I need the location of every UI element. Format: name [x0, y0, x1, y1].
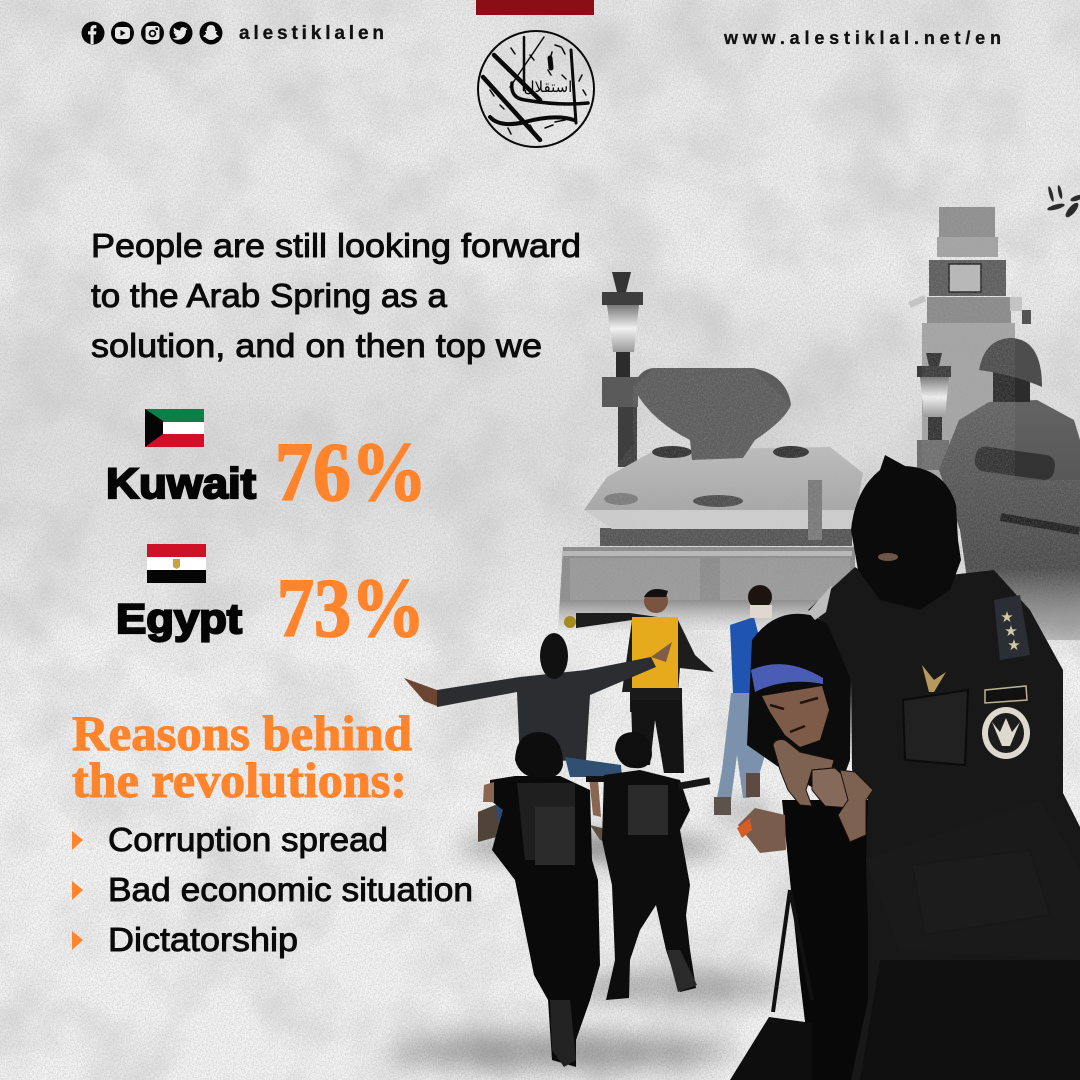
logo: calligraphic emblem: استقلال: [524, 79, 572, 96]
reasons heading: Reasons behind: [72, 705, 412, 761]
woman: dark dress: [782, 800, 900, 1080]
officer and woman: interlocked hands: [773, 740, 873, 842]
reason 1: Corruption spread: [108, 821, 388, 858]
flag: Kuwait: [145, 409, 204, 447]
woman: face: [762, 686, 829, 747]
icon: snapchat: [200, 22, 222, 44]
reasons heading: [72, 705, 412, 808]
background photo: street lamp: [602, 272, 643, 467]
tower lamp: [917, 353, 951, 470]
reasons heading: the revolutions:: [72, 752, 407, 808]
tank lower hull: [558, 547, 855, 630]
grain over the grey photo subjects: [555, 200, 1080, 640]
officer: eye slit: [878, 553, 898, 561]
tank hatch: [633, 368, 791, 460]
heading text: solution, and on then top we: [91, 327, 542, 364]
stat: Egypt: Egypt: [116, 595, 242, 642]
icon: facebook: [82, 22, 104, 44]
officer: round patch: [982, 707, 1030, 759]
icon: instagram: [141, 22, 164, 44]
icon: twitter: [170, 22, 192, 44]
protester: masked man with arms out: [404, 633, 672, 845]
heading text: People are still looking forward: [91, 227, 581, 264]
heading text: [91, 227, 581, 364]
flag: Egypt: [147, 544, 206, 583]
officer: hood: [851, 455, 961, 610]
protester: man in yellow: [564, 589, 714, 773]
woman being held: [730, 614, 900, 1080]
woman: phone hand: [737, 808, 786, 853]
social handle text: alestiklalen: [239, 23, 384, 44]
reason 3: Dictatorship: [108, 921, 298, 958]
stat: Egypt: [116, 544, 425, 655]
officer: uniform: [808, 567, 1080, 1080]
officer: gold insignia: [922, 665, 946, 692]
background photo: tank: [558, 368, 863, 630]
stat: Egypt: 73%: [277, 562, 425, 655]
officer: collar badge: [808, 585, 832, 620]
protester: man in blue: [714, 585, 772, 815]
reasons list: [72, 821, 473, 958]
top red tab: [476, 0, 594, 15]
officer: shoulder tab: [985, 686, 1027, 703]
officer: epaulet with stars: ★: [1000, 609, 1014, 626]
website url: www.alestiklal.net/en: [723, 28, 1001, 48]
stat: Kuwait: [106, 409, 427, 519]
logo: calligraphic emblem: [478, 31, 594, 147]
ground shadows: [385, 808, 790, 1070]
stat: Kuwait: 76%: [275, 426, 427, 519]
background photo: soldier: [939, 338, 1080, 640]
social media handle: [82, 22, 384, 44]
tank turret: [584, 447, 863, 513]
riot police officer 2: [602, 732, 710, 1000]
woman: blue band: [751, 664, 823, 692]
icon: youtube: [111, 22, 134, 44]
riot police officer 1: [483, 732, 636, 1067]
woman: headscarf: [747, 614, 851, 800]
stat: Kuwait: Kuwait: [106, 460, 256, 508]
woman: handbag: [730, 890, 812, 1080]
officer: epaulet with stars: ★: [1007, 637, 1021, 654]
icon: olive branch: [1047, 185, 1080, 219]
officer: epaulet with stars: [994, 595, 1030, 660]
masked officer holding the woman: [773, 455, 1080, 1080]
heading text: to the Arab Spring as a: [91, 277, 448, 314]
officer: epaulet with stars: ★: [1004, 623, 1018, 640]
background photo: tower with lamp: [908, 207, 1031, 483]
reason 2: Bad economic situation: [108, 871, 473, 908]
